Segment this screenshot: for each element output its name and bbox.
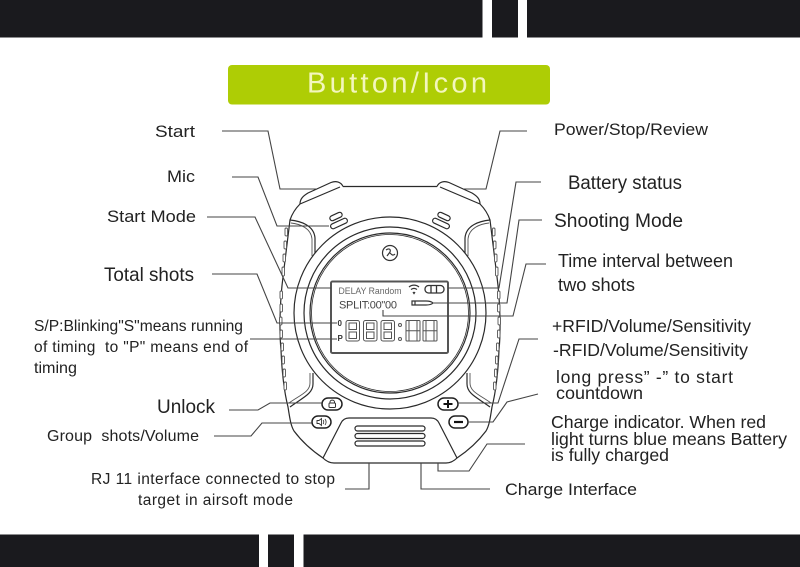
label: Time interval — [558, 251, 733, 295]
device illustration — [280, 182, 500, 463]
LCD screen — [331, 282, 448, 353]
label: long press countdown: countdown — [556, 383, 643, 403]
label: Total shots: Total shots — [104, 264, 194, 286]
label: +RFID: +RFID/Volume/Sensitivity — [552, 316, 751, 336]
label: Mic: Mic — [167, 168, 195, 186]
label: S/P blinking: of timing to "P" means end of — [34, 339, 249, 356]
side panels — [289, 220, 491, 407]
title banner — [228, 65, 550, 104]
icon: bullet — [412, 301, 433, 305]
label: Shooting Mode: Shooting Mode — [554, 210, 683, 232]
bottom black band — [0, 534, 800, 567]
label: Charge indicator: Charge indicator. When red — [551, 412, 766, 432]
label: Unlock: Unlock — [157, 396, 215, 418]
label: Group shots/Volume: Group shots/Volume — [47, 428, 199, 445]
icon: plus button — [438, 398, 458, 410]
icon: mic slots — [329, 211, 451, 230]
label: Charge Interface: Charge Interface — [505, 480, 637, 499]
label: RJ 11 interface: RJ 11 interface connected to stop — [91, 471, 335, 488]
label: -RFID: -RFID/Volume/Sensitivity — [553, 340, 748, 360]
icon: volume button — [312, 416, 331, 428]
S/P indicators — [338, 319, 344, 343]
title banner: Button/Icon — [307, 68, 487, 100]
LCD delay text: DELAY Random — [338, 286, 402, 297]
leader lines — [207, 131, 546, 489]
label: Charge indicator: light turns blue means Battery — [551, 429, 787, 449]
label: long press countdown — [556, 367, 733, 403]
front vent panel — [323, 418, 457, 458]
icon: lock button — [322, 398, 342, 410]
seven segment digits — [346, 320, 437, 341]
device body outline — [280, 182, 500, 463]
label: Start: Start — [155, 122, 195, 141]
label: Power/Stop/Review: Power/Stop/Review — [554, 121, 708, 139]
label: RJ 11 interface — [91, 471, 335, 509]
label: RJ 11 interface: target in airsoft mode — [138, 492, 293, 509]
label: Time interval: two shots — [558, 275, 635, 295]
icon: minus button — [449, 416, 468, 428]
icon: battery — [425, 286, 444, 293]
label: Charge indicator: is fully charged — [551, 445, 669, 465]
icon: logo — [382, 246, 398, 260]
label: Start Mode: Start Mode — [107, 208, 196, 226]
S/P indicators: P — [338, 334, 344, 343]
label: Charge indicator — [551, 412, 787, 465]
label: Time interval: Time interval between — [558, 251, 733, 271]
label: S/P blinking: timing — [34, 360, 77, 377]
label: S/P blinking — [34, 318, 249, 377]
S/P indicators: 0 — [338, 319, 342, 328]
side grip ribs — [280, 228, 500, 390]
icon: wifi — [409, 285, 419, 294]
LCD split text: SPLIT:00"00 — [339, 300, 397, 312]
label: S/P blinking: S/P:Blinking"S"means running — [34, 318, 243, 335]
label: long press countdown: long press” -” to start — [556, 367, 733, 387]
top black band — [0, 0, 800, 38]
label: Battery status: Battery status — [568, 173, 682, 194]
dial rings — [294, 217, 486, 409]
